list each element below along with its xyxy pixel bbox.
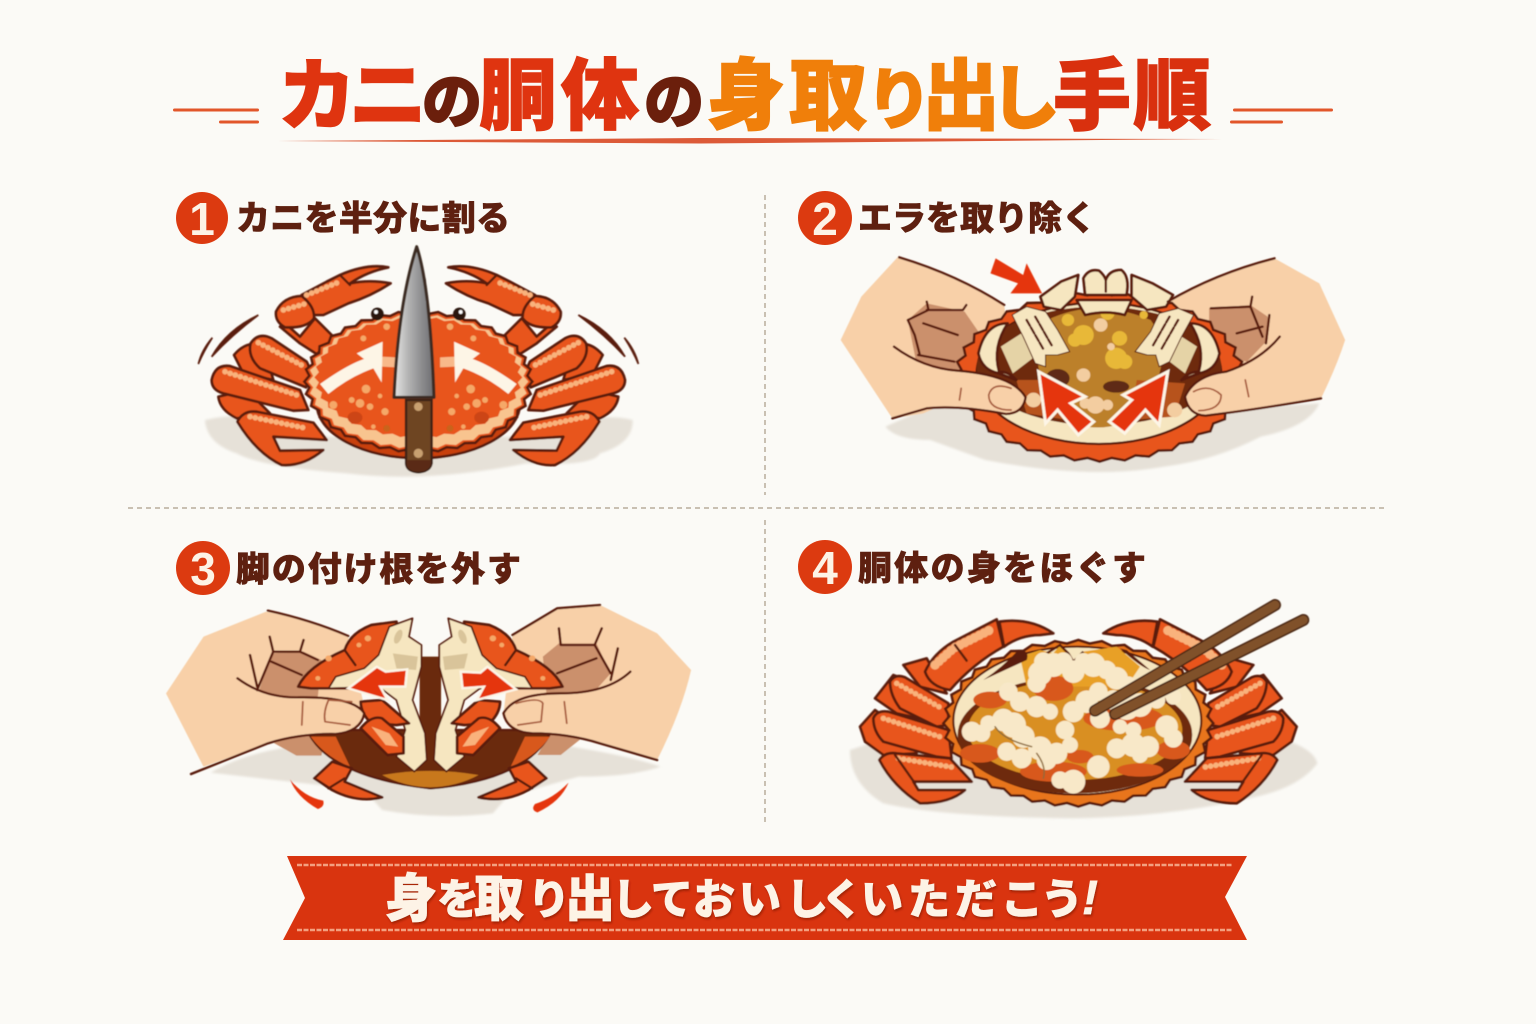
gills [1012, 307, 1194, 367]
step 4 heading: 胴体の身をほぐす [858, 550, 1146, 588]
banner text: う [1041, 876, 1083, 923]
centre dark gap [420, 657, 441, 763]
banner text: お [693, 876, 735, 923]
step 1 heading: 1 [189, 193, 215, 245]
stitching [297, 865, 1232, 930]
banner text: こ [1001, 876, 1043, 923]
step 1 heading: カニを半分に割る [236, 200, 510, 238]
title right rules [1230, 108, 1333, 124]
arrow: pull left [348, 667, 407, 700]
banner text: 出 [565, 871, 615, 927]
shell piece [298, 622, 400, 688]
step 4 heading: 4 [812, 542, 838, 594]
ribbon shape [283, 856, 1247, 940]
shell spots and arrow [320, 308, 397, 432]
illustration: removing gills [841, 257, 1345, 472]
palm shadows [257, 643, 611, 756]
title text: カ [278, 52, 356, 140]
shell [943, 640, 1213, 807]
shell [955, 292, 1244, 462]
title text: り [866, 63, 932, 137]
banner text: だ [955, 876, 997, 923]
step 3 heading [176, 541, 521, 595]
title text: 身 [707, 52, 785, 140]
orange patches [960, 676, 1190, 782]
title [173, 52, 1333, 144]
shadow [850, 737, 1317, 818]
arm [280, 318, 335, 354]
chopsticks [1095, 605, 1303, 714]
crab half with legs and claw [198, 266, 391, 465]
motion marks [290, 779, 569, 812]
shadow [205, 416, 633, 477]
title text: 出 [922, 52, 1000, 140]
title text: 取 [789, 52, 867, 140]
panel: step 4 [798, 540, 1317, 818]
title text: の [644, 69, 704, 136]
banner text: い [861, 876, 903, 923]
mouth parts [1040, 270, 1173, 315]
wrist [276, 296, 314, 327]
leg stubs [361, 700, 409, 725]
knife [394, 247, 434, 472]
banner [283, 856, 1247, 940]
banner text: く [821, 876, 863, 923]
step 3 heading: 3 [190, 543, 216, 595]
back of hands [841, 257, 1345, 418]
right hand lines [504, 605, 657, 760]
arrow: gills right [1109, 372, 1168, 433]
arm and pincer [999, 621, 1053, 647]
shadow [885, 403, 1319, 472]
title left rules [173, 108, 259, 124]
banner text: い [739, 876, 781, 923]
step 2 heading: エラを取り除く [858, 200, 1096, 238]
banner text: 身 [385, 871, 437, 929]
right hand lines [1168, 258, 1321, 416]
panel: step 3 [166, 541, 691, 816]
title underline [278, 138, 1222, 144]
step 3 heading: 脚の付け根を外す [236, 551, 521, 589]
banner text: し [612, 876, 654, 923]
crab half [298, 618, 427, 799]
arrow: pull right [461, 667, 516, 700]
thumbs [892, 337, 1337, 418]
banner text: し [786, 876, 828, 923]
panel: step 2 [798, 191, 1345, 472]
motion arcs [198, 315, 258, 364]
flaked meat [962, 652, 1183, 794]
illustration: crab with knife [198, 247, 638, 477]
step 2 heading [798, 191, 1096, 245]
left hand lines [892, 257, 1026, 418]
title text: 順 [1133, 52, 1211, 140]
pincer [302, 266, 391, 315]
lower shell [307, 730, 552, 788]
step 2 heading: 2 [812, 193, 838, 245]
carapace [304, 311, 532, 458]
dividers [128, 195, 1385, 822]
thumbs [166, 670, 691, 767]
gill frames [978, 323, 1219, 380]
meat creases [995, 727, 1044, 778]
step 1 heading [176, 192, 510, 245]
crab half legs [860, 619, 1053, 803]
step 4 heading [798, 540, 1146, 594]
title text: 手 [1053, 52, 1131, 140]
illustration: detaching leg joints [166, 605, 691, 816]
dark organs [1046, 369, 1129, 393]
title text: 体 [561, 52, 639, 140]
illustration: flaking body meat [850, 605, 1317, 818]
banner text: を [437, 876, 479, 923]
banner text: た [908, 876, 950, 923]
back of hands [166, 605, 691, 767]
palm shadows [908, 303, 1268, 372]
arrow: gills left [1039, 372, 1094, 435]
title text: 胴 [479, 52, 557, 140]
banner text: て [651, 876, 693, 923]
panel: step 1 [176, 192, 638, 477]
title text: の [422, 69, 482, 136]
banner text: ! [1082, 872, 1098, 925]
roe blobs [1062, 307, 1148, 369]
title text: ニ [349, 52, 427, 140]
title text: し [990, 60, 1060, 138]
left hand lines [191, 611, 364, 774]
white arrow [320, 342, 383, 394]
banner text: 取 [474, 871, 524, 927]
arrow: pointing at mouth parts [990, 258, 1042, 293]
shadow [211, 747, 661, 816]
banner text: り [528, 876, 570, 923]
